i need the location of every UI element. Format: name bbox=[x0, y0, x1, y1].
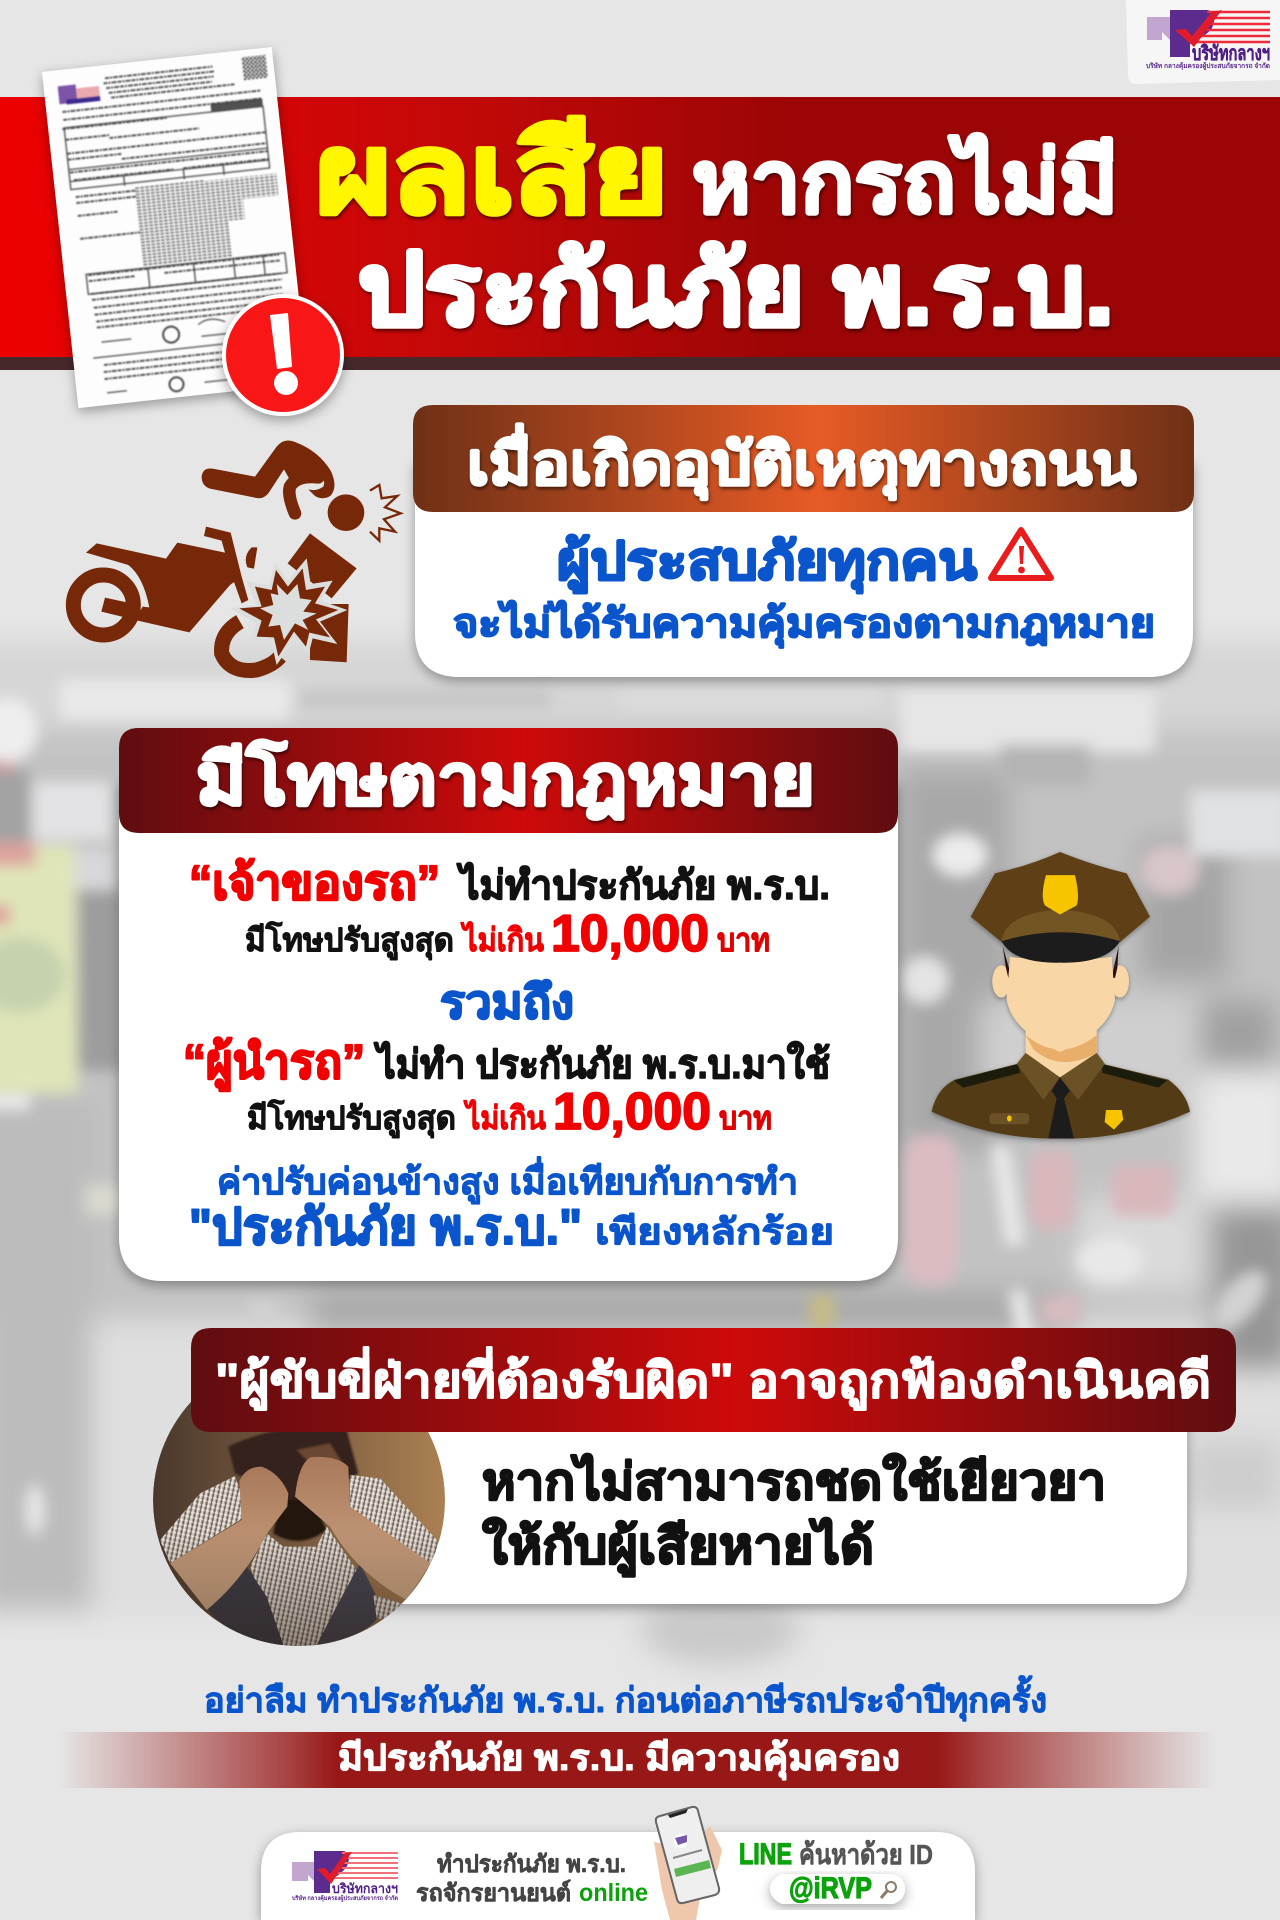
panel header bbox=[191, 1328, 1236, 1432]
line search text bbox=[739, 1838, 933, 1871]
victims text: ผู้ประสบภัยทุกคน bbox=[557, 533, 977, 594]
logo card top right bbox=[1126, 0, 1280, 84]
icon: red alert circle bbox=[224, 296, 342, 414]
panel body bbox=[300, 1420, 1187, 1604]
owner fine: บาท bbox=[717, 922, 770, 958]
insurance document bbox=[42, 47, 308, 408]
driver text: “ผู้นำรถ” bbox=[183, 1036, 365, 1092]
line search text: LINE bbox=[739, 1838, 792, 1871]
insurance cost text bbox=[189, 1199, 834, 1255]
right side scene bbox=[900, 690, 1155, 752]
driver text: ไม่ทำ ประกันภัย พ.ร.บ.มาใช้ bbox=[373, 1041, 830, 1087]
title: line two: ประกันภัย พ.ร.บ. bbox=[358, 234, 1114, 346]
panel header bbox=[119, 728, 898, 833]
panel: at-fault driver bbox=[150, 1328, 1236, 1650]
driver text bbox=[183, 1036, 830, 1092]
owner fine: ไม่เกิน bbox=[460, 921, 544, 958]
header text: "ผู้ขับขี่ฝ่ายที่ต้องรับผิด" อาจถูกฟ้องดำเนินคดี bbox=[215, 1346, 1211, 1411]
driver fine: 10,000 bbox=[553, 1083, 711, 1141]
header text: เมื่อเกิดอุบัติเหตุทางถนน bbox=[467, 423, 1136, 501]
panel body bbox=[415, 460, 1193, 677]
owner text bbox=[189, 857, 830, 910]
title band bbox=[0, 97, 1280, 370]
fine comparison text: ค่าปรับค่อนข้างสูง เมื่อเทียบกับการทำ bbox=[217, 1156, 798, 1205]
driver fine: บาท bbox=[719, 1100, 772, 1136]
icon: warning triangle bbox=[991, 530, 1051, 578]
panel body bbox=[119, 780, 898, 1281]
icon: explosion star bbox=[230, 558, 347, 665]
including text: รวมถึง bbox=[440, 976, 574, 1028]
line id search box: @iRVP bbox=[789, 1872, 872, 1905]
title: yellow keyword: ผลเสีย bbox=[316, 113, 668, 236]
logo: RVP footer: บริษัท กลางคุ้มครองผู้ประสบภัยจากรถ จำกัด bbox=[292, 1894, 398, 1903]
driver fine: ไม่เกิน bbox=[463, 1099, 546, 1136]
motorcycle online text bbox=[416, 1879, 648, 1907]
icon: police officer bbox=[932, 852, 1190, 1139]
title text bbox=[316, 113, 1118, 346]
panel: when an accident happens bbox=[413, 405, 1194, 677]
strip between panels bbox=[60, 680, 290, 720]
owner fine bbox=[245, 905, 770, 963]
slogan band: มีประกันภัย พ.ร.บ. มีความคุ้มครอง bbox=[338, 1737, 900, 1781]
line search text: ค้นหาด้วย ID bbox=[799, 1839, 933, 1870]
buy online text: ทำประกันภัย พ.ร.บ. bbox=[437, 1851, 626, 1878]
logo: RVP top: บริษัท กลางคุ้มครองผู้ประสบภัยจากรถ จำกัด bbox=[1146, 61, 1270, 71]
insurance cost text: เพียงหลักร้อย bbox=[595, 1211, 834, 1252]
owner text: “เจ้าของรถ” bbox=[189, 857, 440, 910]
reminder text: อย่าลืม ทำประกันภัย พ.ร.บ. ก่อนต่อภาษีรถประจำปีทุกครั้ง bbox=[204, 1675, 1047, 1722]
no legal protection text: จะไม่ได้รับความคุ้มครองตามกฎหมาย bbox=[453, 600, 1155, 649]
photo: distressed man bbox=[153, 1402, 445, 1646]
panel: legal penalty bbox=[119, 728, 898, 1281]
title: line one: หากรถไม่มี bbox=[692, 133, 1118, 231]
logo: RVP footer: บริษัทกลางฯ bbox=[332, 1881, 398, 1896]
logo: RVP top bbox=[1146, 10, 1270, 71]
owner fine: มีโทษปรับสูงสุด bbox=[245, 921, 454, 961]
owner fine: 10,000 bbox=[551, 905, 709, 963]
motorcycle online text: online bbox=[579, 1879, 648, 1907]
compensation text: หากไม่สามารถชดใช้เยียวยา bbox=[482, 1453, 1106, 1510]
insurance cost text: "ประกันภัย พ.ร.บ." bbox=[189, 1199, 582, 1255]
header text: มีโทษตามกฎหมาย bbox=[196, 739, 815, 820]
icon: motorcycle crash bbox=[73, 440, 401, 670]
icon: phone in hand bbox=[654, 1807, 722, 1920]
driver fine: มีโทษปรับสูงสุด bbox=[247, 1099, 456, 1139]
compensation text line two: ให้กับผู้เสียหายได้ bbox=[482, 1517, 874, 1577]
panel header bbox=[413, 405, 1194, 512]
driver fine bbox=[247, 1083, 772, 1141]
slogan band bbox=[58, 1732, 1216, 1788]
motorcycle online text: รถจักรยานยนต์ bbox=[416, 1879, 571, 1907]
person in vest bbox=[0, 698, 38, 762]
logo: RVP footer bbox=[292, 1851, 398, 1903]
contact pill bbox=[261, 1807, 975, 1920]
owner text: ไม่ทำประกันภัย พ.ร.บ. bbox=[456, 862, 830, 908]
